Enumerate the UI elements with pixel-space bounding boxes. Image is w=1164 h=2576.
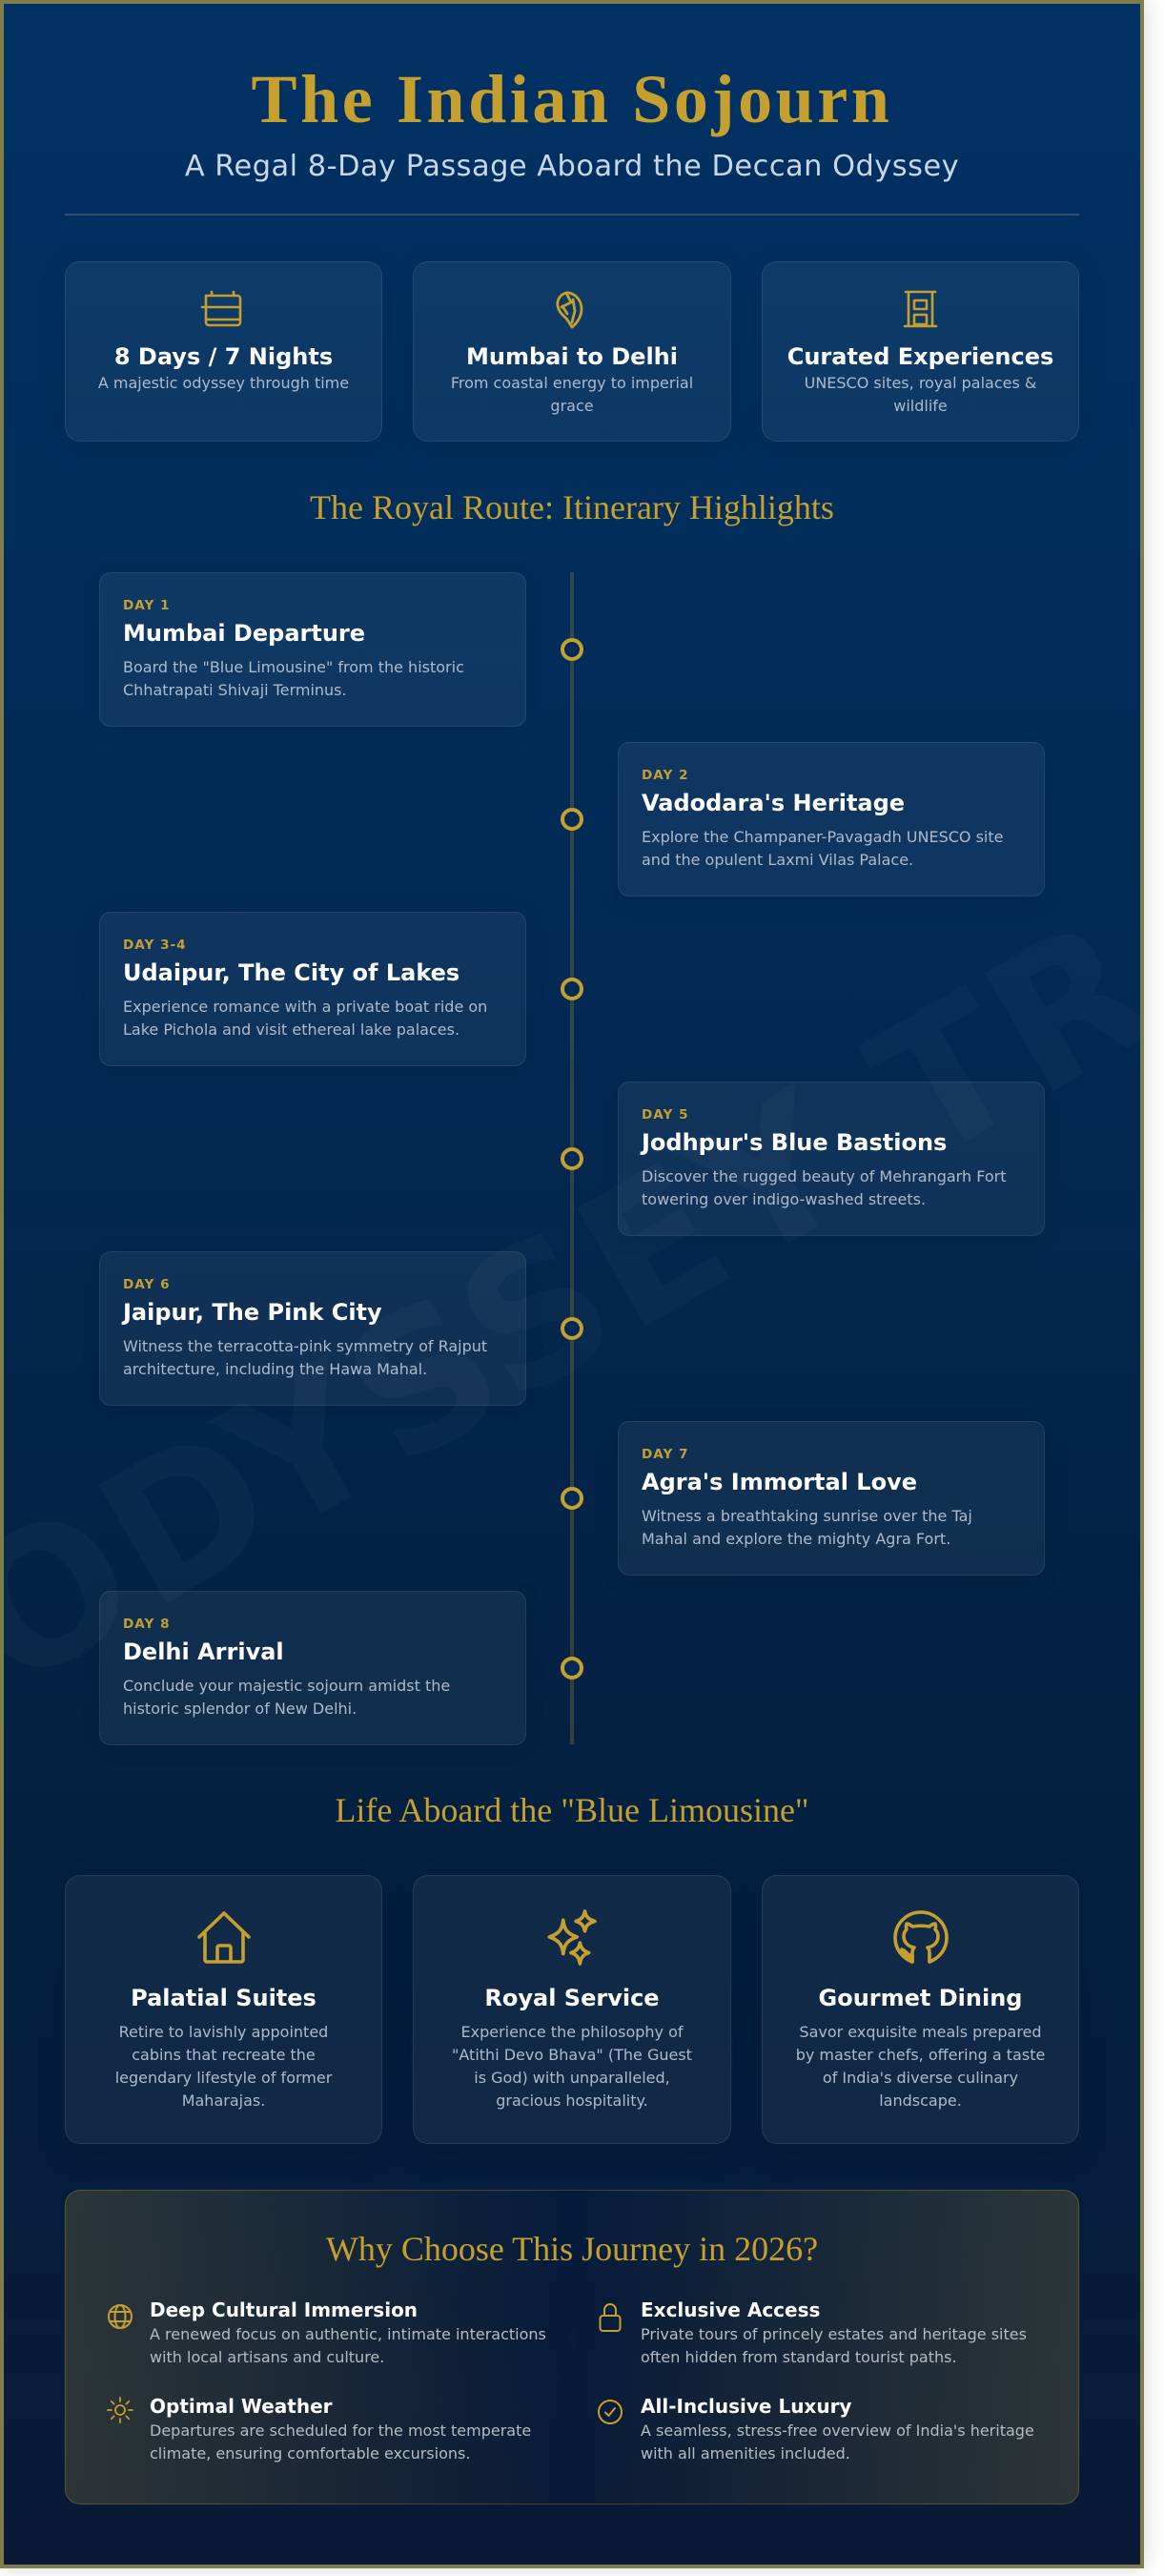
itinerary card: day 8: DAY 8 bbox=[123, 1617, 171, 1632]
itinerary card: day 6: architecture, including the Hawa Mahal. bbox=[123, 1360, 427, 1378]
icon: globe bbox=[556, 292, 583, 328]
itinerary card: day 5: Jodhpur's Blue Bastions bbox=[642, 1129, 947, 1156]
reason: exclusive access: often hidden from standard tourist paths. bbox=[641, 2348, 957, 2366]
itinerary card: day 8: historic splendor of New Delhi. bbox=[123, 1700, 357, 1718]
itinerary card: day 1: DAY 1 bbox=[123, 598, 171, 613]
itinerary card: day 2: DAY 2 bbox=[642, 768, 689, 783]
feature description: cabins that recreate the bbox=[132, 2046, 316, 2064]
itinerary card: day 3-4: Lake Pichola and visit ethereal lake palaces. bbox=[123, 1020, 459, 1039]
icon: house bbox=[197, 1911, 251, 1964]
feature description: landscape. bbox=[879, 2092, 962, 2110]
heading: life aboard: Life Aboard the "Blue Limousine" bbox=[335, 1791, 809, 1829]
itinerary card: day 7: Witness a breathtaking sunrise over the Taj bbox=[642, 1507, 972, 1525]
icon: lock bbox=[599, 2303, 622, 2332]
timeline dot: day 6 bbox=[561, 1317, 583, 1340]
stat description bbox=[805, 374, 1036, 415]
stat description: wildlife bbox=[893, 397, 948, 415]
icon: sparkles bbox=[547, 1909, 597, 1966]
icon: palace bbox=[904, 290, 938, 328]
reason: optimal weather: Optimal Weather bbox=[150, 2395, 333, 2418]
itinerary card: day 3-4: Udaipur, The City of Lakes bbox=[123, 959, 459, 986]
panel heading: Why Choose This Journey in 2026? bbox=[326, 2230, 818, 2268]
itinerary card: day 1: Mumbai Departure bbox=[123, 620, 365, 647]
reason: cultural immersion bbox=[150, 2298, 546, 2366]
stat description: A majestic odyssey through time bbox=[98, 374, 349, 392]
itinerary card: day 5: DAY 5 bbox=[642, 1107, 689, 1123]
itinerary card: day 5: Discover the rugged beauty of Mehrangarh Fort bbox=[642, 1167, 1006, 1185]
timeline dot: day 8 bbox=[561, 1657, 583, 1680]
icon: sun bbox=[107, 2397, 133, 2423]
itinerary card: day 7: Agra's Immortal Love bbox=[642, 1469, 917, 1495]
icon: emblem bbox=[893, 1910, 949, 1964]
itinerary card: day 1 bbox=[99, 572, 526, 727]
itinerary card: day 7 bbox=[618, 1421, 1045, 1576]
stat description: From coastal energy to imperial bbox=[451, 374, 693, 392]
reason: optimal weather bbox=[150, 2395, 531, 2463]
itinerary card: day 7: Mahal and explore the mighty Agra Fort. bbox=[642, 1530, 950, 1548]
itinerary card: day 5: towering over indigo-washed streets. bbox=[642, 1190, 926, 1208]
feature title: Royal Service bbox=[484, 1985, 660, 2011]
icon: globe bbox=[108, 2304, 133, 2329]
reason: all-inclusive luxury bbox=[641, 2395, 1034, 2463]
stat description bbox=[451, 374, 693, 415]
panel: gourmet dining bbox=[762, 1875, 1079, 2144]
itinerary card: day 2: and the opulent Laxmi Vilas Palace. bbox=[642, 851, 913, 869]
feature description: by master chefs, offering a taste bbox=[796, 2046, 1045, 2064]
icon: check circle bbox=[598, 2400, 623, 2424]
reason: exclusive access bbox=[641, 2298, 1027, 2366]
itinerary card: day 3-4 bbox=[99, 912, 526, 1066]
itinerary card: day 2: Explore the Champaner-Pavagadh UNESCO site bbox=[642, 828, 1003, 846]
reason: cultural immersion: with local artisans and culture. bbox=[150, 2348, 384, 2366]
timeline line bbox=[570, 572, 574, 1744]
timeline bbox=[570, 572, 574, 1744]
stat description: grace bbox=[550, 397, 594, 415]
itinerary card: day 6: Jaipur, The Pink City bbox=[123, 1299, 382, 1326]
timeline dot: day 3-4 bbox=[561, 978, 583, 1000]
reason: all-inclusive luxury: with all amenities included. bbox=[641, 2444, 850, 2463]
timeline dot: day 1 bbox=[561, 638, 583, 661]
feature title: Gourmet Dining bbox=[819, 1985, 1022, 2011]
feature title: Palatial Suites bbox=[131, 1985, 317, 2011]
reason: cultural immersion: Deep Cultural Immersion bbox=[150, 2298, 418, 2321]
panel: route bbox=[413, 261, 731, 442]
subtitle: A Regal 8-Day Passage Aboard the Deccan Odyssey bbox=[185, 150, 959, 183]
reason: optimal weather: Departures are scheduled for the most temperate bbox=[150, 2421, 531, 2440]
reason: all-inclusive luxury: All-Inclusive Luxury bbox=[641, 2395, 851, 2418]
panel: palatial suites bbox=[65, 1875, 382, 2144]
itinerary card: day 8: Delhi Arrival bbox=[123, 1638, 284, 1665]
panel: experiences bbox=[762, 261, 1079, 442]
stat title: 8 Days / 7 Nights bbox=[114, 343, 333, 370]
feature description: "Atithi Devo Bhava" (The Guest bbox=[452, 2046, 692, 2064]
reason: optimal weather: climate, ensuring comfortable excursions. bbox=[150, 2444, 470, 2463]
panel: duration bbox=[65, 261, 382, 442]
itinerary card: day 1: Chhatrapati Shivaji Terminus. bbox=[123, 681, 347, 699]
itinerary card: day 6 bbox=[99, 1251, 526, 1406]
stat title: Curated Experiences bbox=[787, 343, 1053, 370]
header divider bbox=[65, 214, 1079, 216]
feature description: is God) with unparalleled, bbox=[474, 2069, 670, 2087]
timeline dot: day 2 bbox=[561, 808, 583, 831]
itinerary card: day 6: Witness the terracotta-pink symmetry of Rajput bbox=[123, 1337, 487, 1355]
stat description: UNESCO sites, royal palaces & bbox=[805, 374, 1036, 392]
itinerary card: day 3-4: Experience romance with a private boat ride on bbox=[123, 998, 487, 1016]
itinerary card: day 8: Conclude your majestic sojourn amidst the bbox=[123, 1677, 450, 1695]
feature description: Retire to lavishly appointed bbox=[119, 2023, 328, 2041]
itinerary card: day 1: Board the "Blue Limousine" from the historic bbox=[123, 658, 464, 676]
feature description bbox=[796, 2023, 1045, 2110]
title: The Indian Sojourn bbox=[251, 61, 893, 137]
feature description: gracious hospitality. bbox=[496, 2092, 648, 2110]
panel: royal service bbox=[413, 1875, 731, 2144]
timeline dot: day 5 bbox=[561, 1147, 583, 1170]
itinerary card: day 5 bbox=[618, 1082, 1045, 1236]
icon: calendar bbox=[200, 290, 242, 326]
panel: why choose this journey bbox=[65, 2190, 1079, 2504]
reason: exclusive access: Private tours of princely estates and heritage sites bbox=[641, 2325, 1027, 2343]
itinerary card: day 7: DAY 7 bbox=[642, 1447, 689, 1462]
reason: all-inclusive luxury: A seamless, stress-free overview of India's heritage bbox=[641, 2421, 1034, 2440]
reason: exclusive access: Exclusive Access bbox=[641, 2298, 820, 2321]
feature description: legendary lifestyle of former bbox=[115, 2069, 332, 2087]
feature description: of India's diverse culinary bbox=[823, 2069, 1018, 2087]
itinerary card: day 3-4: DAY 3-4 bbox=[123, 938, 187, 953]
stat title: Mumbai to Delhi bbox=[466, 343, 678, 370]
reason: cultural immersion: A renewed focus on authentic, intimate interactions bbox=[150, 2325, 546, 2343]
itinerary card: day 2 bbox=[618, 742, 1045, 896]
timeline dot: day 7 bbox=[561, 1487, 583, 1510]
itinerary card: day 6: DAY 6 bbox=[123, 1277, 171, 1292]
feature description: Experience the philosophy of bbox=[460, 2023, 684, 2041]
feature description bbox=[452, 2023, 692, 2110]
feature description bbox=[115, 2023, 332, 2110]
feature description: Savor exquisite meals prepared bbox=[799, 2023, 1042, 2041]
heading: itinerary: The Royal Route: Itinerary Highlights bbox=[310, 488, 834, 526]
itinerary card: day 2: Vadodara's Heritage bbox=[642, 790, 905, 816]
feature description: Maharajas. bbox=[182, 2092, 265, 2110]
itinerary card: day 8 bbox=[99, 1591, 526, 1745]
